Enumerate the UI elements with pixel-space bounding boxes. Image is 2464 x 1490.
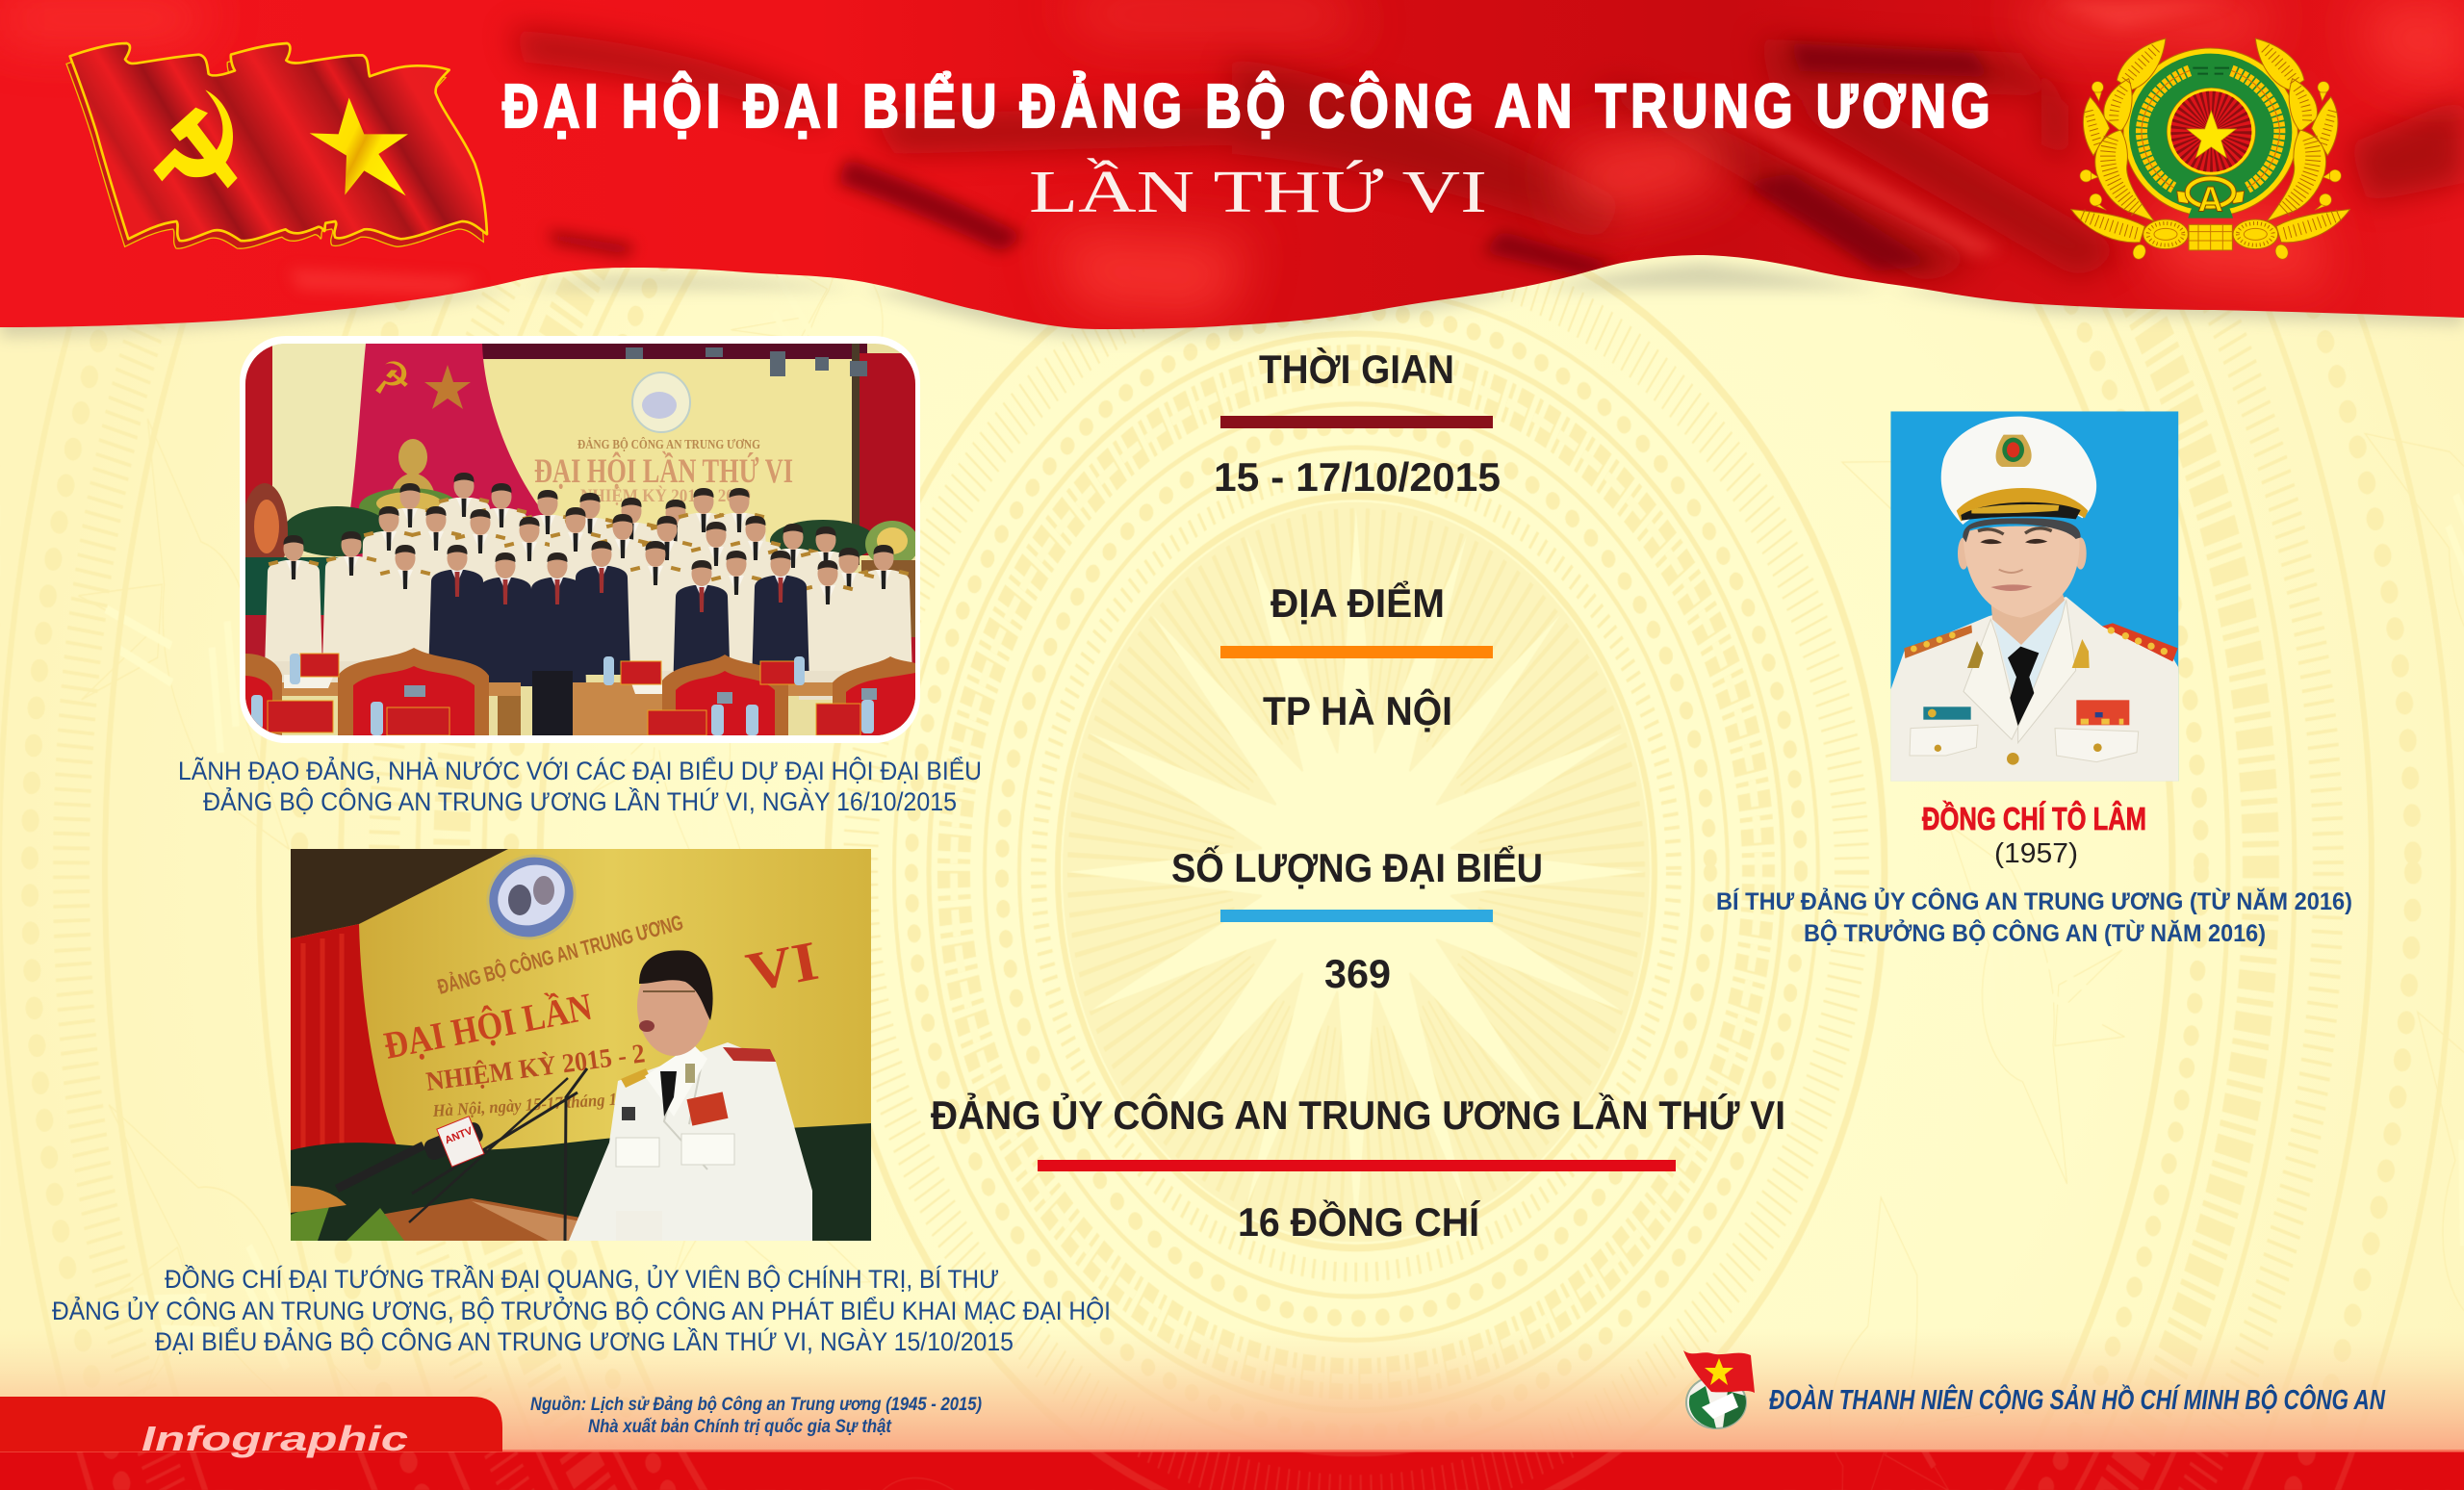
conference logo: [474, 840, 589, 954]
photo frame: [240, 336, 920, 743]
epaulets: [1904, 625, 1972, 658]
cap badge: [1996, 435, 2032, 467]
plants: [291, 1123, 871, 1241]
bar: location: [1220, 646, 1493, 658]
subtitle: LẦN THỨ VI: [1029, 159, 1487, 225]
birth year: (1957): [1994, 838, 2078, 869]
tie: [2008, 647, 2039, 726]
chairs: [245, 648, 915, 735]
neck: [1990, 584, 2065, 645]
name placards: [268, 654, 860, 735]
caption: speaker photo: ĐẠI BIỂU ĐẢNG BỘ CÔNG AN TRUNG ƯƠNG LẦN THỨ VI, NGÀY 15/10/2015: [155, 1325, 1014, 1356]
epaulet: [723, 1047, 776, 1062]
icon: party flag: [66, 43, 487, 248]
emblem outer ring: [2123, 48, 2297, 217]
icon: public security emblem: [2071, 39, 2350, 261]
emblem base: A: [2197, 179, 2223, 218]
bust: [393, 439, 434, 491]
panel: speaker photo: Hà Nội, ngày 15-17 tháng 10: [431, 1089, 626, 1120]
face: [1964, 527, 2079, 618]
tables: [282, 675, 833, 735]
seat labels: [404, 685, 877, 704]
panel: speaker photo: [291, 840, 871, 1241]
icon: yellow star: [310, 98, 408, 195]
red curtain: [291, 924, 397, 1155]
panel: speaker photo: ĐẠI HỘI LẦN: [380, 985, 596, 1067]
speaker head: [637, 956, 710, 1056]
emblem centre disc: [2167, 88, 2255, 175]
microphones: [337, 1068, 587, 1241]
buttons: [1935, 743, 2102, 765]
value: location: TP HÀ NỘI: [1263, 687, 1452, 733]
TV microphone: ANTV: [444, 1125, 475, 1146]
speaker body: [569, 1042, 812, 1241]
infographic tab: [0, 1397, 502, 1458]
caption: group photo: [178, 755, 982, 816]
heading: time: THỜI GIAN: [1259, 346, 1454, 392]
portrait caption: BÍ THƯ ĐẢNG ỦY CÔNG AN TRUNG ƯƠNG (TỪ NĂM 2016): [1716, 886, 2352, 915]
stage lights: [626, 347, 867, 376]
shirt: [1992, 600, 2070, 715]
collar badge: [685, 1064, 695, 1083]
caption: group photo: ĐẢNG BỘ CÔNG AN TRUNG ƯƠNG LẦN THỨ VI, NGÀY 16/10/2015: [203, 785, 957, 816]
delegates back rows: [362, 473, 845, 612]
infographic label: Infographic: [141, 1419, 408, 1458]
party symbols: ☭: [372, 353, 412, 403]
ears: [1958, 537, 1969, 570]
bottom red band: [0, 1450, 2464, 1490]
emblem leaves: [2071, 39, 2350, 261]
panel: portrait: [1890, 411, 2178, 782]
panel: congress group photo: ĐẠI HỘI LẦN THỨ VI: [534, 451, 793, 490]
TV microphone: [422, 1117, 485, 1167]
icon: youth union logo: [1683, 1350, 1755, 1428]
panel: congress group photo: NHIỆM KỲ 2015 - 2020: [580, 485, 751, 506]
backdrop text: ĐẢNG BỘ CÔNG AN TRUNG ƯƠNG: [435, 911, 685, 999]
lapels: [1964, 619, 2018, 739]
podium: [375, 1198, 616, 1241]
bar: delegates: [1220, 910, 1493, 922]
source note: [530, 1395, 982, 1437]
backdrop text: ĐẢNG BỘ CÔNG AN TRUNG ƯƠNG: [578, 436, 760, 452]
value: party committee: 16 ĐỒNG CHÍ: [1238, 1198, 1480, 1245]
delegates front row: [265, 531, 912, 735]
panel: congress group photo: [240, 336, 920, 743]
medals: [2076, 700, 2129, 725]
bar: time: [1220, 416, 1493, 428]
title: ĐẠI HỘI ĐẠI BIỂU ĐẢNG BỘ CÔNG AN TRUNG ƯƠNG: [502, 70, 1990, 141]
cap: [1941, 417, 2096, 525]
value: delegates: 369: [1324, 951, 1391, 996]
uniform: [1890, 597, 2178, 782]
caption: speaker photo: ĐẢNG ỦY CÔNG AN TRUNG ƯƠNG, BỘ TRƯỞNG BỘ CÔNG AN PHÁT BIỂU KHAI MẠC ĐẠI HỘI: [52, 1295, 1111, 1325]
panel: speaker photo: VI: [741, 929, 823, 1004]
emblem on backdrop: [632, 372, 690, 432]
source note: Nhà xuất bản Chính trị quốc gia Sự thật: [588, 1417, 892, 1437]
caption: group photo: LÃNH ĐẠO ĐẢNG, NHÀ NƯỚC VỚI CÁC ĐẠI BIỂU DỰ ĐẠI HỘI ĐẠI BIỂU: [178, 755, 982, 785]
emblem base: [2177, 178, 2245, 250]
ceiling: [291, 849, 508, 938]
name tag: [1923, 706, 1971, 720]
glass: [616, 1211, 662, 1241]
panel: delegates: [1171, 844, 1543, 996]
caption: speaker photo: [52, 1263, 1111, 1356]
header red flag banner: [0, 0, 2464, 332]
panel: time: [1214, 346, 1501, 500]
value: time: 15 - 17/10/2015: [1214, 454, 1501, 500]
eyes: [1980, 539, 2002, 544]
flowers and plants: [245, 483, 915, 560]
flowers: [291, 1198, 404, 1241]
heading: party committee: ĐẢNG ỦY CÔNG AN TRUNG ƯƠNG LẦN THỨ VI: [931, 1092, 1785, 1138]
portrait caption: BỘ TRƯỞNG BỘ CÔNG AN (TỪ NĂM 2016): [1804, 918, 2266, 947]
source note: Nguồn: Lịch sử Đảng bộ Công an Trung ương (1945 - 2015): [530, 1395, 982, 1415]
nose and mouth: [1999, 570, 2023, 573]
icon: hammer and sickle: [153, 90, 238, 189]
water bottles: [251, 654, 874, 735]
collar and tie: [645, 1044, 707, 1117]
bar: party committee: [1038, 1160, 1676, 1171]
bottom background fade: [0, 1328, 2464, 1453]
header shadow: [0, 263, 2464, 337]
emblem top marks: [2193, 68, 2229, 74]
medals: [687, 1092, 728, 1126]
pockets: [1910, 725, 1978, 756]
name: To Lam: ĐỒNG CHÍ TÔ LÂM: [1922, 800, 2146, 836]
panel: party committee: [931, 1092, 1785, 1245]
portrait caption: [1716, 886, 2352, 947]
caption: speaker photo: ĐỒNG CHÍ ĐẠI TƯỚNG TRẦN ĐẠI QUANG, ỦY VIÊN BỘ CHÍNH TRỊ, BÍ THƯ: [165, 1263, 999, 1294]
heading: location: ĐỊA ĐIỂM: [1270, 579, 1445, 626]
panel: location: [1220, 579, 1493, 733]
panel: speaker photo: NHIỆM KỲ 2015 - 2: [424, 1039, 647, 1097]
heading: delegates: SỐ LƯỢNG ĐẠI BIỂU: [1171, 844, 1543, 890]
collar insignia: [1967, 641, 1984, 668]
hair: [1963, 518, 2081, 542]
